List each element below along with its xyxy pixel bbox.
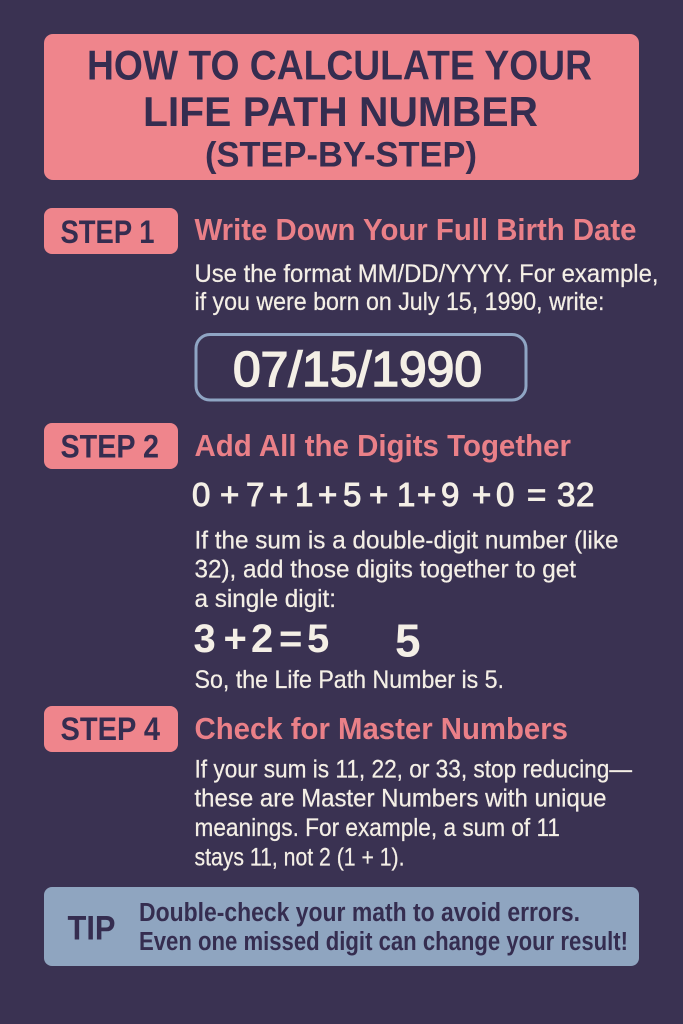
panel: step 4: [44, 706, 632, 872]
date example box: [196, 334, 526, 400]
tip text: Double-check your math to avoid errors.: [139, 899, 580, 927]
date example box: 07/15/1990: [233, 343, 482, 397]
double-digit explanation: a single digit:: [194, 585, 336, 613]
step 1 badge: [44, 208, 178, 254]
title: [87, 42, 592, 174]
tip label: TIP: [68, 910, 116, 948]
step 1 badge: STEP 1: [60, 214, 154, 250]
life path result sentence: So, the Life Path Number is 5.: [194, 666, 504, 694]
step 1 instructions: [194, 260, 658, 316]
step 4 badge: STEP 4: [60, 711, 160, 747]
panel: title banner: [44, 34, 639, 180]
panel: tip: [44, 887, 639, 966]
panel: step 1: [44, 208, 658, 400]
title: LIFE PATH NUMBER: [143, 88, 538, 135]
title: (STEP-BY-STEP): [205, 136, 477, 174]
master numbers explanation: meanings. For example, a sum of 11: [194, 814, 560, 842]
tip text: [139, 899, 628, 956]
step 4 badge: [44, 706, 178, 752]
master numbers explanation: these are Master Numbers with unique: [194, 784, 606, 812]
step 1 heading: Write Down Your Full Birth Date: [194, 212, 636, 247]
step 4 heading: Check for Master Numbers: [194, 711, 568, 746]
master numbers explanation: stays 11, not 2 (1 + 1).: [194, 844, 404, 872]
title: HOW TO CALCULATE YOUR: [87, 42, 592, 88]
double-digit explanation: If the sum is a double-digit number (like: [194, 526, 618, 554]
step 2 badge: STEP 2: [60, 428, 159, 464]
double-digit explanation: [194, 526, 618, 613]
double-digit explanation: 32), add those digits together to get: [194, 556, 576, 584]
step 1 instructions: if you were born on July 15, 1990, write:: [194, 288, 604, 316]
reduction equation: 3+2=5: [194, 617, 329, 661]
panel: step 2: [44, 423, 618, 694]
step 2 badge: [44, 423, 178, 469]
result digit: 5: [395, 614, 421, 666]
master numbers explanation: [194, 756, 632, 872]
digit sum equation: 0+7+1+5+1+9+0=32: [192, 476, 594, 513]
step 1 instructions: Use the format MM/DD/YYYY. For example,: [194, 260, 658, 288]
step 2 heading: Add All the Digits Together: [194, 428, 571, 463]
master numbers explanation: If your sum is 11, 22, or 33, stop reducing—: [194, 756, 632, 784]
